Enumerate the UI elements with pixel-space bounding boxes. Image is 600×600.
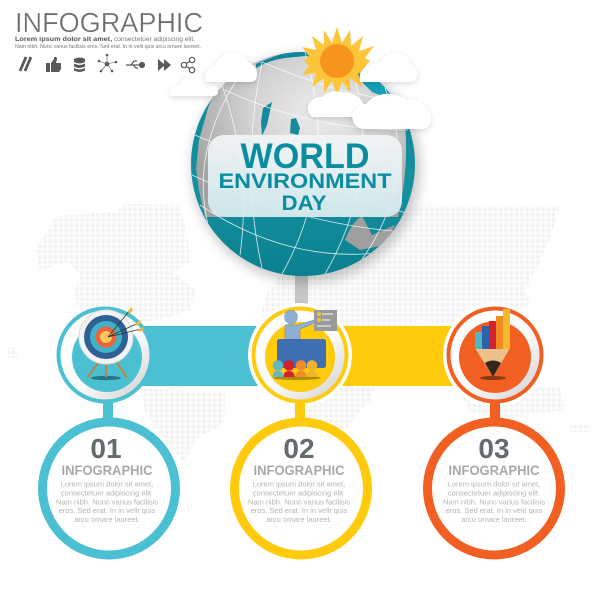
lower ring 3 [428, 422, 560, 555]
teal connector bar [140, 326, 262, 386]
upper ring 1 [58, 308, 152, 402]
step 1 column [42, 307, 176, 555]
cloud: upper left [205, 52, 257, 82]
step number 2: 02 [283, 433, 315, 464]
yellow connector bar [340, 326, 458, 386]
step body 3: Lorem ipsum dolor sit amet, [448, 480, 540, 488]
icon: presenter and audience [272, 310, 337, 380]
step body 1: consectetuer adipiscing elit. [61, 488, 153, 498]
connector stem 1 [103, 402, 113, 420]
globe shadow [192, 54, 420, 282]
globe land and ocean [190, 42, 420, 282]
step body 2: Nam nibh. Nunc varius facilisis [248, 498, 350, 506]
step heading 2: INFOGRAPHIC [254, 462, 344, 478]
step body 1: Nam nibh. Nunc varius facilisis [56, 498, 158, 506]
header text: Lorem ipsum dolor sit amet, consectetuer adipiscing elit. [15, 36, 195, 43]
step body 2: arcu ornare laoreet. [266, 515, 332, 524]
stem under globe [295, 270, 308, 314]
step body 3 [443, 480, 545, 524]
icon: pencil bar chart [475, 309, 510, 380]
step 3 column [428, 303, 560, 555]
icon: network [98, 54, 117, 72]
step heading 3: INFOGRAPHIC [448, 462, 540, 478]
halo 3 [443, 303, 547, 407]
icon: usb [126, 61, 144, 68]
step body 2: consectetuer adipiscing elit. [253, 488, 345, 498]
title banner [208, 135, 402, 217]
upper ring 3 [448, 308, 542, 402]
cloud: upper right [360, 52, 417, 82]
step number 1: 01 [90, 433, 122, 464]
icon: fast forward [158, 59, 171, 71]
step body 1: arcu ornare laoreet. [74, 515, 140, 524]
step body 1 [56, 480, 158, 524]
step 2 column [234, 303, 368, 555]
connector stem 3 [490, 402, 500, 420]
banner title text [218, 137, 392, 215]
globe grid lines [192, 52, 412, 274]
step body 1: eros. Sed erat. In in velit quis [59, 506, 156, 515]
banner title text: WORLD [240, 137, 370, 176]
icon row [20, 54, 195, 73]
cloud: centre [308, 91, 364, 117]
step number 3: 03 [478, 433, 510, 464]
cloud: far left [170, 74, 218, 96]
header text: Nam nibh. Nunc varius facilisis eros. Sed erat. In in velit quis arcu ornare laoreet. [15, 44, 201, 50]
cloud: large right [352, 94, 431, 129]
step body 1: Lorem ipsum dolor sit amet, [61, 480, 153, 488]
step body 2: Lorem ipsum dolor sit amet, [253, 480, 345, 488]
step body 3: Nam nibh. Nunc varius facilisis [443, 498, 545, 506]
lower ring 1 [42, 422, 176, 555]
icon: target on tripod [79, 307, 144, 380]
icon: share [181, 57, 195, 73]
halo 2 [248, 303, 352, 407]
step body 2 [248, 480, 350, 524]
icon: thumbs up [46, 57, 61, 72]
lower ring 2 [234, 422, 368, 555]
connector stem 2 [295, 402, 305, 420]
header block [15, 7, 203, 73]
sun [302, 27, 374, 96]
icon: database [74, 58, 85, 72]
step heading 1: INFOGRAPHIC [62, 462, 152, 478]
upper ring 2 [254, 308, 346, 402]
icon: tools [20, 57, 31, 71]
globe [190, 42, 420, 282]
step body 3: eros. Sed erat. In in velit quis [446, 506, 543, 515]
banner title text: DAY [282, 192, 326, 215]
step body 2: eros. Sed erat. In in velit quis [251, 506, 348, 515]
step body 3: arcu ornare laoreet. [461, 515, 527, 524]
banner title text: ENVIRONMENT [218, 169, 392, 193]
step body 3: consectetuer adipiscing elit. [448, 488, 540, 498]
clouds [170, 52, 431, 129]
header title: INFOGRAPHIC [15, 7, 203, 38]
header text [15, 36, 201, 50]
dotted world map background [0, 200, 600, 470]
